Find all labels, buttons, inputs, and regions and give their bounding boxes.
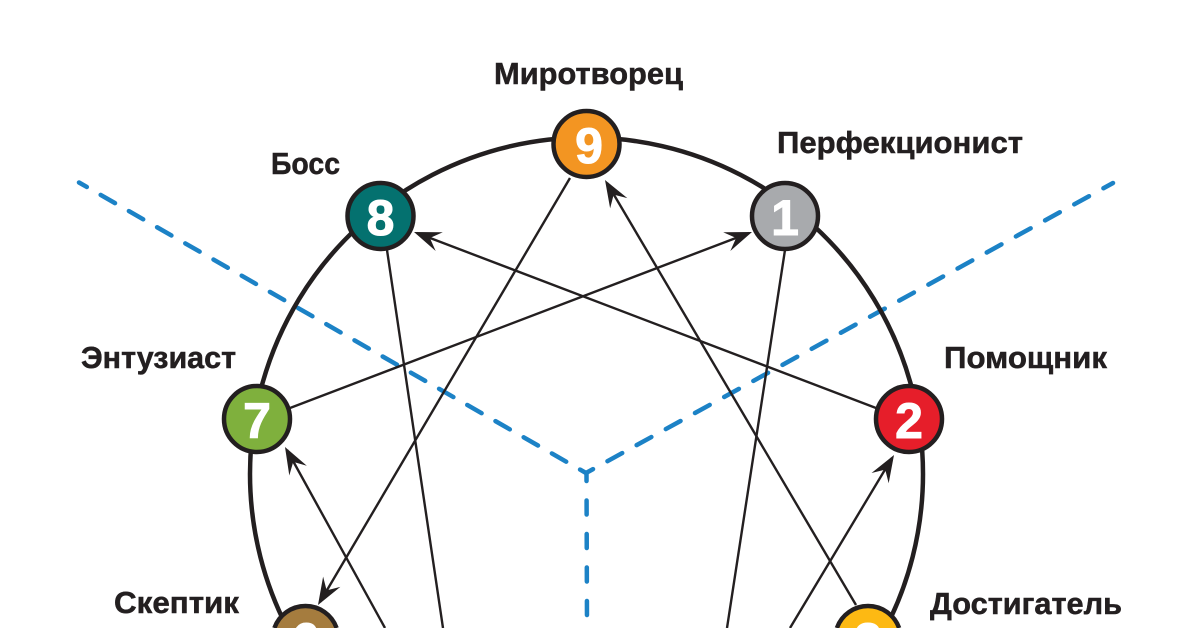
node 1: 1 [771,190,799,246]
outer ring [250,138,923,628]
node 7 [224,386,290,452]
node 1 [752,183,818,249]
node 8 [348,183,414,249]
node 3 [837,606,899,628]
node 8: 8 [367,190,394,246]
node 9: 9 [575,118,603,174]
label: Перфекционист: Перфекционист [777,125,1023,160]
node 9 [554,111,620,177]
node 2 [876,386,942,452]
node 6 [274,606,337,628]
label: Помощник: Помощник [944,340,1107,375]
arrowheads [276,175,903,610]
inner connecting lines [287,178,892,628]
node 2: 2 [895,393,923,449]
label: Достигатель: Достигатель [930,586,1122,621]
label: Скептик: Скептик [114,585,239,620]
label: Босс: Босс [271,146,340,181]
label: Миротворец: Миротворец [494,56,683,91]
blue dashed dividers between the three centres [79,182,1113,626]
node 7: 7 [243,393,271,449]
label: Энтузиаст: Энтузиаст [81,340,236,375]
